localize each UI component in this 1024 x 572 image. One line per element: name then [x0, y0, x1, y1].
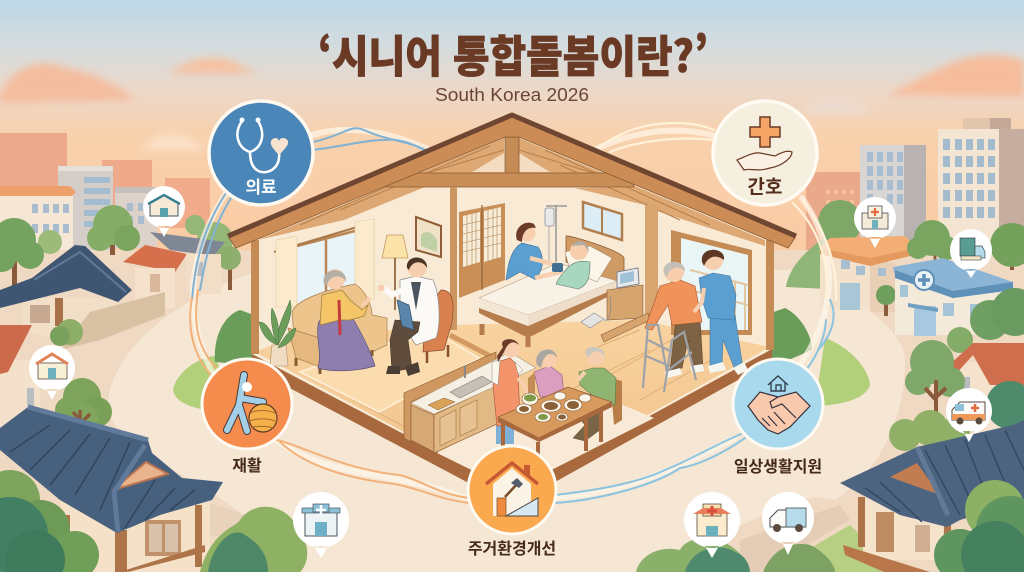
care house: [228, 115, 796, 506]
right wall post: [766, 240, 774, 350]
sky triangles: [472, 153, 504, 172]
hanok top left: [0, 245, 165, 350]
cream ribbon nursing: [595, 123, 836, 300]
doctor with chair: [378, 258, 453, 376]
pin: clinic right: [854, 197, 896, 248]
tree right: [889, 340, 1024, 451]
pin: ambulance right: [946, 388, 992, 442]
nurse: [506, 223, 563, 280]
bushes bottom right: [636, 538, 835, 572]
bush bottom left: [200, 507, 307, 572]
picture frame: [416, 217, 441, 257]
tree beside bottom left hanok: [55, 378, 112, 435]
icon: person with ball: [227, 375, 277, 432]
label: rehabilitation: 재활: [232, 457, 262, 475]
red roof house left edge: [0, 325, 40, 450]
road: [108, 270, 905, 572]
walker frame: [643, 325, 696, 392]
floor plank lines: [300, 330, 720, 440]
elderly lady in hanbok: [318, 269, 375, 371]
woman cooking: [492, 339, 530, 444]
king post: [505, 137, 519, 175]
right gable panel: [519, 138, 765, 246]
left room window: [274, 219, 374, 307]
title: ‘시니어 통합돌봄이란?’: [318, 21, 708, 85]
label: medical: 의료: [245, 178, 277, 197]
circle: nursing: [713, 101, 817, 205]
interior walls: [252, 125, 772, 491]
blue ribbon support: [555, 300, 834, 503]
label: housing improvement: 주거환경개선: [468, 540, 556, 558]
roof band: [229, 117, 795, 248]
circle: daily living support: [733, 359, 823, 449]
elderly man with walker: [645, 262, 704, 378]
hanok bottom right: [740, 420, 1024, 572]
skyline left: [0, 133, 210, 257]
floor edge band: [252, 349, 772, 506]
pin: medical van right: [950, 229, 992, 278]
icon: house with hammer: [486, 463, 538, 516]
icon: stethoscope: [237, 118, 288, 172]
background house with red roof left: [123, 232, 225, 308]
circle: medical: [209, 101, 313, 205]
centre post: [450, 187, 457, 330]
floor lamp: [382, 235, 408, 310]
blue ribbon medical: [192, 128, 428, 300]
right room post: [645, 205, 658, 323]
hanok bottom left: [0, 407, 260, 572]
rug: [300, 335, 479, 412]
dining table: [498, 387, 612, 470]
circle: rehabilitation: [202, 359, 292, 449]
circle: housing improvement: [468, 446, 556, 534]
sliding door: [459, 203, 505, 298]
left gable panel: [258, 138, 504, 240]
connecting ribbons: [190, 123, 836, 503]
pin: hospital bottom left: [293, 492, 349, 558]
pin: ambulance bottom: [762, 492, 814, 555]
pin: hospital bottom: [684, 492, 740, 558]
iv stand: [545, 205, 567, 265]
roof ridge: [228, 115, 796, 236]
icon: house and handshake: [748, 376, 810, 434]
subtitle: South Korea 2026: [435, 85, 589, 105]
skyline right: [806, 118, 1024, 264]
gable plank lines: [300, 146, 710, 225]
floor beam: [450, 335, 492, 357]
lawn left: [173, 356, 235, 410]
clouds: [0, 55, 1024, 150]
floor: [255, 320, 770, 490]
carer in blue: [694, 250, 748, 375]
elderly woman diner: [528, 348, 564, 400]
right room doorway: [671, 230, 752, 335]
orange ribbon rehab: [190, 290, 470, 503]
patient: [556, 241, 590, 289]
icon: cross in hand: [737, 117, 792, 170]
lawn right: [815, 338, 870, 406]
elderly man diner: [573, 346, 622, 441]
sky background: [0, 0, 1024, 300]
houseplant: [259, 300, 296, 366]
blue clinic building: [893, 258, 1024, 353]
clinics and trees right: [786, 200, 1024, 316]
tie beam: [386, 173, 634, 187]
ground: [0, 250, 1024, 572]
bedroom window: [583, 202, 622, 240]
lower tiled floor: [437, 403, 654, 490]
bushes beside house: [215, 308, 812, 370]
bed: [479, 236, 624, 347]
kitchen counter: [404, 352, 536, 453]
label: daily living support: 일상생활지원: [734, 458, 822, 476]
sofa: [288, 284, 387, 374]
pin: house left: [29, 345, 75, 400]
label: nursing: 간호: [748, 176, 782, 198]
background trees left: [0, 205, 241, 290]
pin: school top left: [143, 186, 185, 237]
left wall post: [251, 240, 259, 354]
red roof house right: [947, 343, 1024, 437]
nightstand and monitor: [581, 268, 650, 342]
